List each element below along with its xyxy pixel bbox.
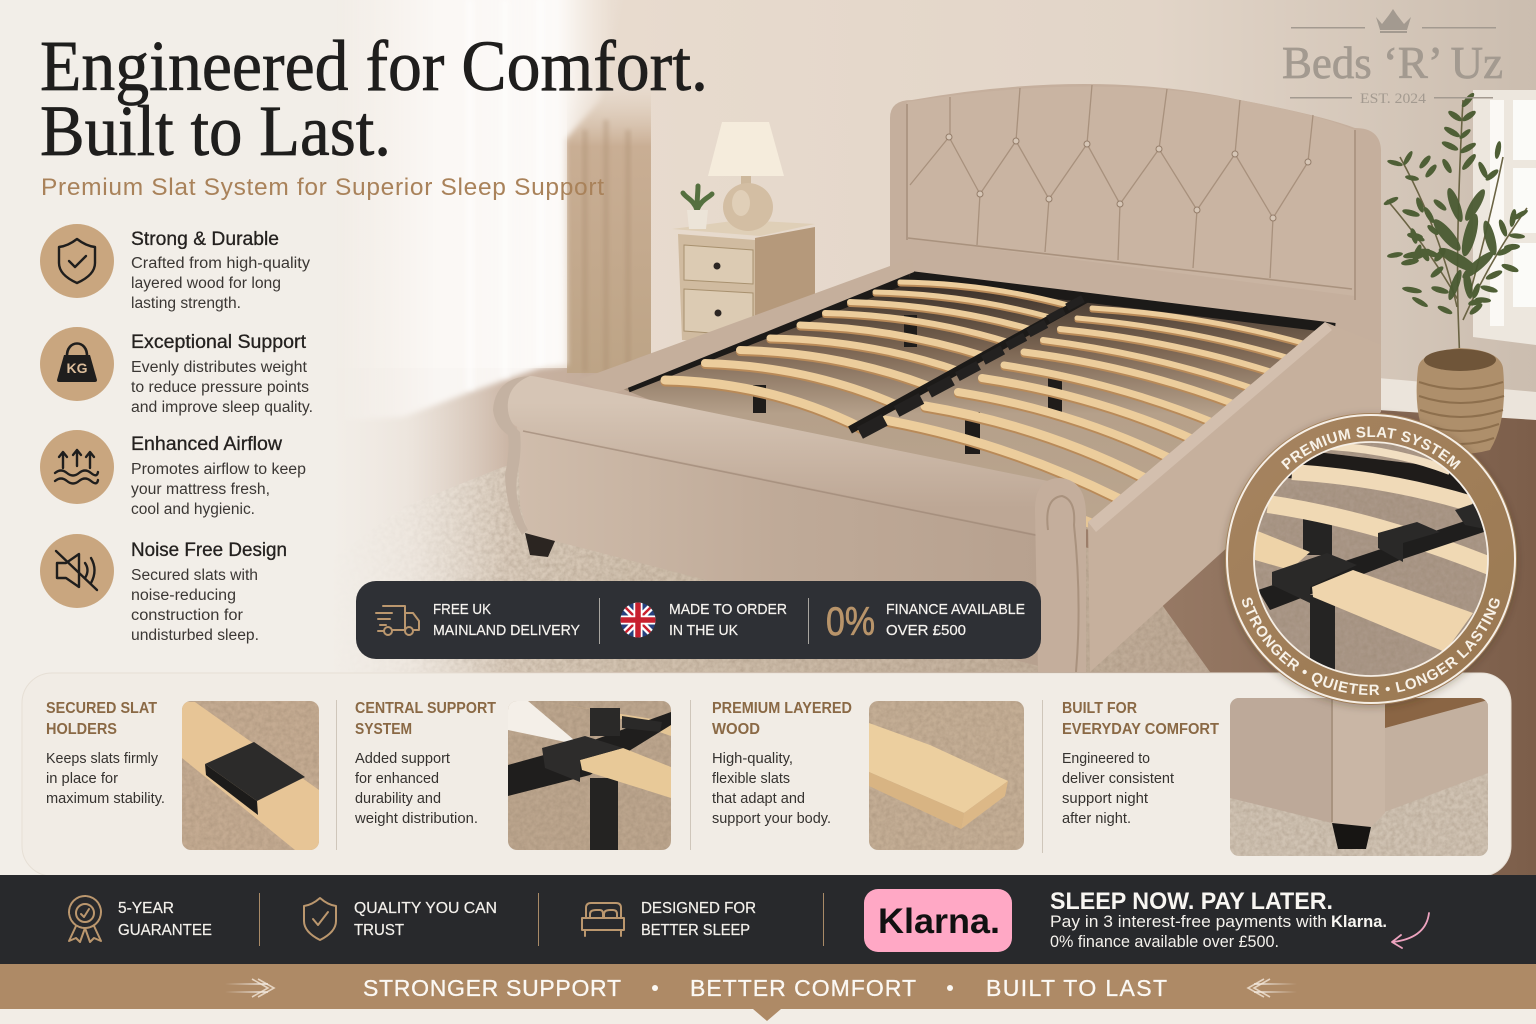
left side rail — [578, 258, 914, 395]
medallion bottom text: STRONGER • QUIETER • LONGER LASTING — [1242, 598, 1500, 696]
delivery and finance pill: OVER £500 — [886, 623, 966, 639]
klarna message: Pay in 3 interest-free payments with — [1050, 913, 1327, 931]
slogan band: BUILT TO LAST — [986, 975, 1167, 1001]
feature: exceptional support: Evenly distributes weight — [131, 359, 308, 376]
card: central support system: weight distribution. — [354, 811, 478, 827]
card: central support system: Added support — [355, 751, 450, 767]
card: central support system: durability and — [355, 791, 441, 807]
klarna message: 0% finance available over £500. — [1050, 933, 1279, 951]
klarna message: SLEEP NOW. PAY LATER. — [1050, 888, 1333, 915]
feature: noise free design: Noise Free Design — [131, 539, 287, 561]
card: built for everyday comfort: EVERYDAY COMFORT — [1062, 721, 1219, 738]
icon: shield — [59, 239, 95, 283]
trust band: DESIGNED FOR — [641, 900, 756, 917]
feature: strong and durable: lasting strength. — [131, 295, 241, 312]
trust band: TRUST — [354, 922, 405, 939]
card: built for everyday comfort: BUILT FOR — [1062, 700, 1137, 717]
dense plant foliage — [1430, 186, 1499, 301]
feature: strong and durable — [40, 224, 310, 312]
trust band: BETTER SLEEP — [641, 922, 750, 939]
floor — [0, 368, 1536, 1009]
klarna message: Klarna. — [1331, 913, 1387, 931]
feature: noise free design — [40, 534, 287, 644]
rug — [330, 420, 1210, 672]
feature: enhanced airflow: cool and hygienic. — [131, 501, 255, 518]
card: premium layered wood: flexible slats — [712, 771, 790, 787]
card: secured slat holders: SECURED SLAT — [46, 700, 157, 717]
wicker pot — [1417, 348, 1504, 454]
feature: strong and durable: Crafted from high-quality — [131, 255, 310, 272]
large plant — [1383, 91, 1529, 367]
arrow: right chevrons — [225, 979, 274, 997]
feature: exceptional support: Exceptional Support — [131, 331, 307, 353]
bottom cream strip — [0, 1009, 1536, 1024]
feature list — [40, 224, 313, 644]
arrow: pink pointer — [1392, 913, 1429, 948]
slogan band — [0, 964, 1536, 1021]
delivery and finance pill — [356, 581, 1041, 659]
delivery and finance pill: MADE TO ORDER — [669, 602, 787, 618]
photo: layered wood slat — [869, 701, 1024, 850]
sheer curtain — [340, 0, 622, 420]
right side rail — [1088, 322, 1381, 672]
medallion top text: PREMIUM SLAT SYSTEM — [1281, 426, 1461, 470]
brand logo: EST. 2024 — [1360, 91, 1427, 107]
klarna message — [1050, 888, 1387, 951]
pointer notch — [753, 1009, 781, 1021]
title: Engineered for Comfort. — [40, 26, 708, 106]
delivery and finance pill: MAINLAND DELIVERY — [433, 623, 580, 639]
delivery and finance pill: IN THE UK — [669, 623, 738, 639]
trust band: 5-YEAR — [118, 900, 174, 917]
klarna badge: Klarna. — [878, 902, 1000, 941]
left slats — [665, 282, 1068, 430]
subtitle: Premium Slat System for Superior Sleep Support — [41, 174, 604, 201]
footboard feet — [525, 533, 555, 557]
brown curtain — [567, 90, 651, 373]
title — [40, 26, 708, 171]
slogan band: BETTER COMFORT — [690, 975, 916, 1001]
trust band: QUALITY YOU CAN — [354, 900, 497, 917]
icon: delivery truck — [376, 606, 419, 635]
crown — [1376, 9, 1411, 30]
brand logo: Beds ‘R’ Uz — [1282, 37, 1503, 88]
table lamp — [708, 122, 784, 231]
central support bar — [850, 295, 1088, 439]
card: central support system: CENTRAL SUPPORT — [355, 700, 496, 717]
delivery and finance pill: 0% — [826, 600, 875, 644]
feature: noise free design: construction for — [131, 607, 243, 624]
footboard roll — [530, 403, 1045, 508]
feature: noise free design: noise-reducing — [131, 587, 236, 604]
left cream fade — [0, 0, 620, 880]
card: central support system: SYSTEM — [355, 721, 412, 738]
footboard scroll end — [1035, 478, 1086, 672]
card: built for everyday comfort: Engineered to — [1062, 751, 1150, 767]
photo: bed corner — [1230, 698, 1488, 856]
card: secured slat holders: HOLDERS — [46, 721, 117, 738]
icon: quality shield — [304, 898, 336, 940]
feature: enhanced airflow: Promotes airflow to keep — [131, 461, 306, 478]
delivery and finance pill: FINANCE AVAILABLE — [886, 602, 1025, 618]
frame rails — [628, 276, 1335, 528]
feature: noise free design: undisturbed sleep. — [131, 627, 259, 644]
card: secured slat holders: maximum stability. — [46, 791, 165, 807]
card: premium layered wood: that adapt and — [712, 791, 805, 807]
card: secured slat holders: in place for — [46, 771, 118, 787]
card: premium layered wood — [712, 700, 1024, 850]
medallion: premium slat system — [1221, 411, 1518, 711]
photo: slat holder — [182, 701, 319, 850]
footboard panel — [517, 425, 1046, 668]
feature: strong and durable: layered wood for long — [131, 275, 281, 292]
card: built for everyday comfort: deliver consistent — [1062, 771, 1174, 787]
trust band — [0, 875, 1536, 964]
icon: airflow — [55, 450, 98, 484]
medallion close-up of slats — [1250, 440, 1492, 680]
trust band: GUARANTEE — [118, 922, 212, 939]
detail cards panel — [22, 673, 1511, 876]
feature: enhanced airflow — [40, 430, 306, 518]
icon: kg weight — [57, 344, 97, 382]
feature: exceptional support — [40, 327, 313, 416]
feature: exceptional support: and improve sleep quality. — [131, 399, 313, 416]
feature: enhanced airflow: your mattress fresh, — [131, 481, 270, 498]
brand logo — [1282, 9, 1503, 107]
card: built for everyday comfort: support night — [1062, 791, 1148, 807]
photo: central support — [508, 701, 671, 850]
skirting board — [1378, 378, 1536, 420]
card: premium layered wood: High-quality, — [712, 751, 793, 767]
open deck under slats — [620, 272, 1335, 530]
feature: exceptional support: to reduce pressure points — [131, 379, 309, 396]
feature: noise free design: Secured slats with — [131, 567, 258, 584]
small potted plant — [683, 186, 712, 229]
slogan band: STRONGER SUPPORT — [363, 975, 621, 1001]
arrow: left chevrons — [1248, 979, 1297, 997]
feature: enhanced airflow: Enhanced Airflow — [131, 433, 283, 455]
nightstand — [672, 220, 815, 345]
icon: bed — [582, 903, 624, 936]
card: central support system: for enhanced — [355, 771, 439, 787]
card: central support system — [354, 700, 671, 850]
klarna badge — [864, 889, 1012, 952]
delivery and finance pill: FREE UK — [433, 602, 491, 618]
card: built for everyday comfort: after night. — [1062, 811, 1131, 827]
card: secured slat holders: Keeps slats firmly — [46, 751, 159, 767]
support legs — [753, 315, 1062, 454]
window — [1473, 90, 1536, 345]
icon: kg weight: KG — [66, 360, 88, 376]
icon: union flag — [620, 602, 656, 638]
title: Built to Last. — [40, 91, 391, 171]
card: premium layered wood: WOOD — [712, 721, 760, 738]
far slat behind footboard — [790, 445, 1095, 525]
card: premium layered wood: support your body. — [712, 811, 831, 827]
feature: strong and durable: Strong & Durable — [131, 228, 279, 250]
right slats — [885, 308, 1310, 500]
card: premium layered wood: PREMIUM LAYERED — [712, 700, 852, 717]
card: secured slat holders — [46, 700, 319, 850]
card: built for everyday comfort — [1062, 698, 1488, 856]
icon: guarantee rosette — [69, 896, 101, 942]
bed — [493, 84, 1381, 672]
headboard — [890, 84, 1381, 360]
icon: muted speaker — [56, 551, 97, 590]
